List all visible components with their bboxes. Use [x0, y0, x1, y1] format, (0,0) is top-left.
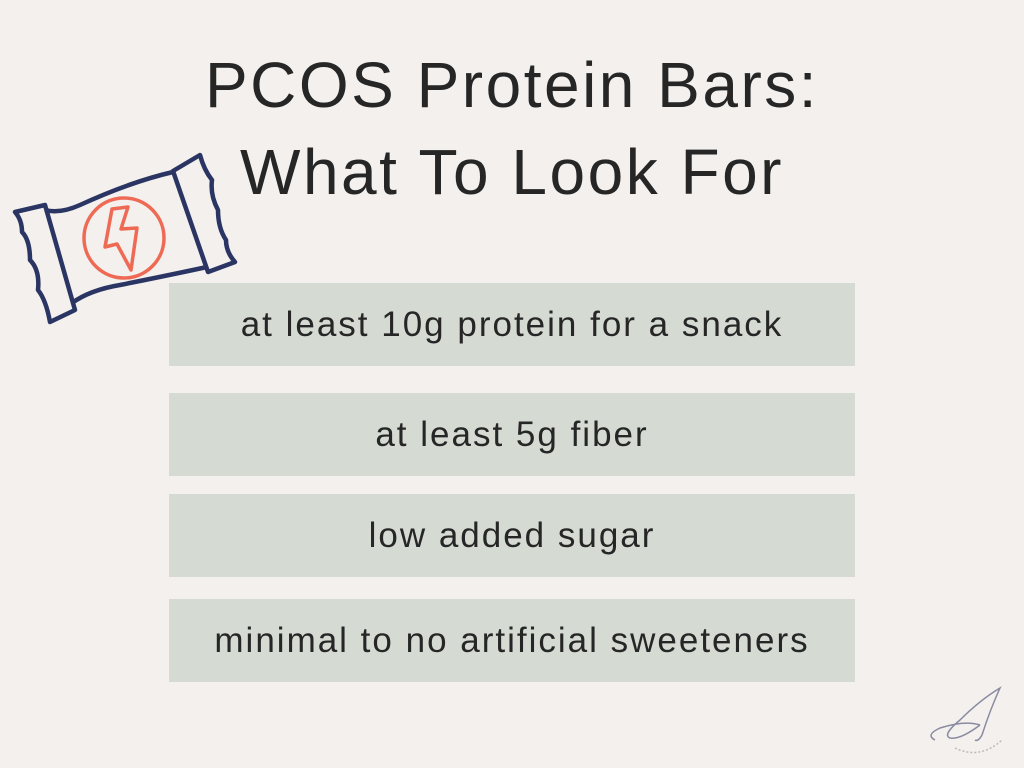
- box 1: [169, 283, 855, 366]
- logo: [930, 686, 1002, 754]
- title: [205, 49, 819, 208]
- title: What To Look For: [240, 136, 784, 208]
- box 4: [169, 599, 855, 682]
- box 4: minimal to no artificial sweeteners: [214, 620, 810, 660]
- box 2: at least 5g fiber: [375, 414, 649, 454]
- box 3: [169, 494, 855, 577]
- icon: protein bar: [12, 152, 238, 324]
- box 2: [169, 393, 855, 476]
- box 1: at least 10g protein for a snack: [241, 304, 783, 344]
- title: PCOS Protein Bars:: [205, 49, 819, 121]
- box 3: low added sugar: [369, 516, 655, 554]
